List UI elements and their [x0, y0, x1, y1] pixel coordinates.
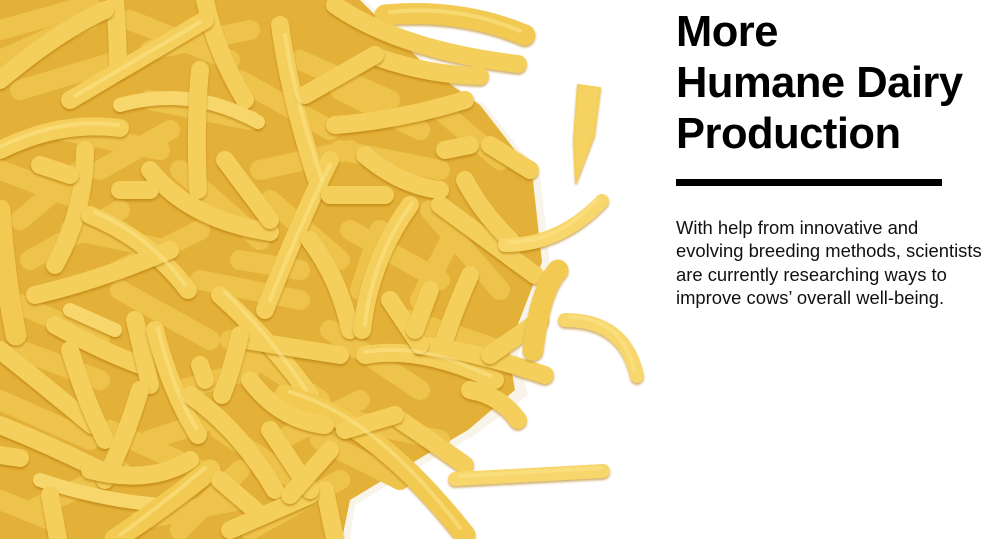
base of cheese pile [0, 0, 542, 539]
title: Production [676, 110, 901, 158]
body text: are currently researching ways to [676, 264, 947, 285]
body text [676, 217, 982, 308]
body text: improve cows’ overall well-being. [676, 287, 944, 308]
highlights on shreds [0, 11, 634, 535]
background layer of shreds [0, 5, 500, 530]
stray shred: long bottom [455, 471, 603, 479]
stray shred: chunky [533, 270, 558, 350]
title: More [676, 8, 778, 56]
body text: With help from innovative and [676, 217, 918, 238]
stray shred: curved right [505, 201, 602, 245]
body text: evolving breeding methods, scientists [676, 240, 982, 261]
title: Humane Dairy [676, 59, 963, 107]
stray shred: curl [565, 320, 637, 376]
stray shred: tall wedge [574, 85, 600, 182]
title [676, 8, 963, 158]
title divider rule [676, 179, 942, 186]
stray shreds around the pile [455, 85, 637, 479]
photo: pile of shredded cheese [0, 0, 646, 539]
soft shadow under cheese pile [0, 0, 550, 539]
foreground layer of shreds [0, 0, 545, 539]
